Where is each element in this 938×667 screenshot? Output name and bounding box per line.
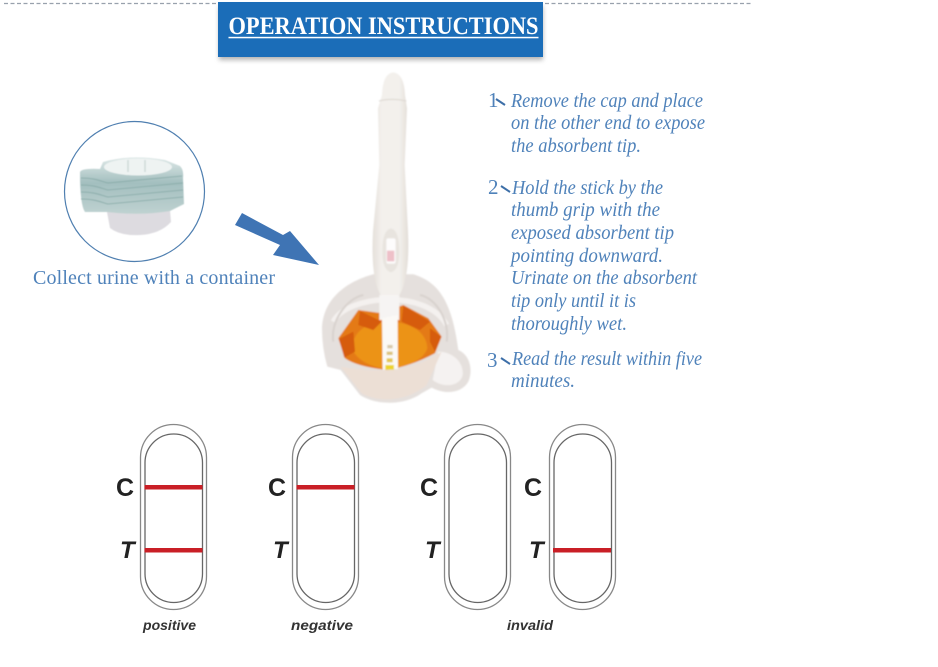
step 3 bbox=[487, 348, 702, 392]
steps text bbox=[487, 88, 705, 392]
step 2: pointing downward. bbox=[509, 245, 663, 267]
cup body bbox=[322, 274, 471, 403]
absorbent tip bbox=[379, 295, 399, 320]
result diagram: positive: T bbox=[120, 537, 137, 564]
arrow: to the test cup bbox=[235, 213, 319, 265]
result diagram: invalid, T line only bbox=[524, 424, 616, 610]
step 1 bbox=[488, 88, 705, 157]
result diagram: negative bbox=[268, 424, 358, 633]
step 2: thoroughly wet. bbox=[511, 313, 627, 335]
step 2: tip only until it is bbox=[511, 290, 636, 312]
step 1: 1 bbox=[488, 88, 498, 112]
step 1: on the other end to expose bbox=[511, 112, 705, 134]
step 1: the absorbent tip. bbox=[511, 135, 641, 157]
urine bbox=[338, 305, 442, 370]
result diagram: invalid, no lines: T bbox=[425, 537, 442, 564]
result window bbox=[382, 228, 399, 272]
step 2: thumb grip with the bbox=[511, 199, 660, 221]
step 1: Remove the cap and place bbox=[510, 90, 703, 112]
step 2: 2 bbox=[488, 175, 498, 199]
icon: container photo in circle bbox=[64, 122, 204, 262]
title banner: OPERATION INSTRUCTIONS bbox=[228, 13, 538, 40]
step 2: Urinate on the absorbent bbox=[511, 267, 697, 289]
stick body bbox=[373, 72, 408, 295]
result diagram: invalid, no lines bbox=[420, 424, 510, 610]
result diagram: negative: negative bbox=[291, 617, 353, 633]
result diagram: negative: C bbox=[268, 474, 286, 502]
title banner bbox=[218, 2, 543, 60]
step 2: Hold the stick by the bbox=[511, 177, 663, 199]
result diagram: positive bbox=[116, 424, 206, 633]
result diagram: positive: positive bbox=[142, 617, 196, 633]
result diagram: invalid, T line only: C bbox=[524, 474, 542, 502]
result diagram: positive: C bbox=[116, 474, 134, 502]
step 2 bbox=[488, 175, 697, 335]
step 3: Read the result within five bbox=[511, 348, 702, 370]
caption: invalid: invalid bbox=[507, 617, 553, 633]
step 3: 3 bbox=[487, 348, 498, 372]
step 2: exposed absorbent tip bbox=[511, 222, 674, 244]
test stick in urine cup photo bbox=[322, 72, 471, 403]
result diagram: invalid, no lines: C bbox=[420, 474, 438, 502]
caption: collect urine: Collect urine with a container bbox=[33, 267, 275, 289]
top dashed rule bbox=[4, 2, 752, 4]
result diagram: invalid, T line only: T bbox=[529, 537, 546, 564]
step 3: minutes. bbox=[511, 370, 575, 392]
result diagram: negative: T bbox=[273, 537, 290, 564]
